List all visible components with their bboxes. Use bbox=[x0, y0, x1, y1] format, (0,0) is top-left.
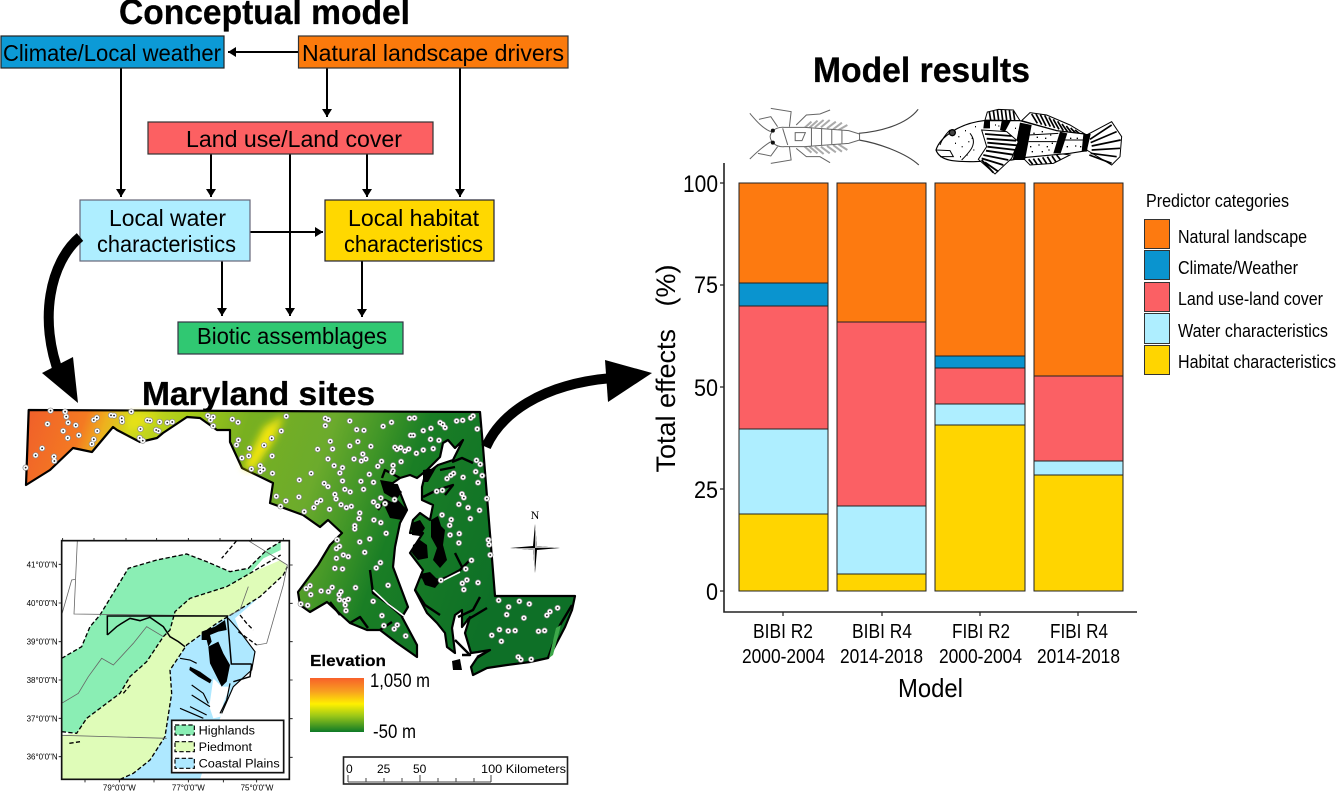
bar: BIBI R4 bbox=[837, 183, 926, 591]
Maryland outline filled with elevation bbox=[26, 410, 575, 675]
box: Natural landscape drivers: Natural landscape drivers bbox=[302, 40, 564, 66]
box: Local habitat characteristics: Local habitat bbox=[348, 205, 480, 231]
bar: BIBI R2 bbox=[739, 183, 828, 591]
box: Local water characteristics: Local water bbox=[109, 205, 226, 231]
x axis title: Model bbox=[898, 673, 963, 703]
ticks bbox=[59, 538, 293, 782]
box: Local water characteristics: characteristics bbox=[97, 231, 236, 257]
arrows between conceptual boxes bbox=[121, 52, 460, 317]
latitude labels: 41°0'0"N bbox=[27, 560, 58, 569]
legend: predictor categories: Predictor categories bbox=[1146, 191, 1289, 211]
inset legend bbox=[172, 720, 284, 773]
box: Land use/Land cover: Land use/Land cover bbox=[186, 126, 402, 152]
box: Biotic assemblages: Biotic assemblages bbox=[197, 323, 387, 349]
longitude labels bbox=[103, 784, 274, 791]
x axis labels: FIBI R4 bbox=[1050, 621, 1108, 643]
inset background bbox=[62, 541, 289, 779]
y axis tick labels: 25 bbox=[694, 477, 718, 504]
fish bands bbox=[983, 120, 1091, 160]
legend: elevation: 1,050 m bbox=[370, 671, 430, 692]
state borders bbox=[62, 541, 287, 738]
fish head details bbox=[949, 130, 955, 136]
region: Highlands bbox=[62, 542, 281, 733]
fish fins bbox=[985, 109, 1122, 165]
scale bar: 25 bbox=[377, 762, 391, 776]
x axis labels: 2014-2018 bbox=[1037, 646, 1120, 668]
fish pectoral fin bbox=[978, 130, 1018, 174]
icon: north arrow compass: N bbox=[531, 508, 540, 522]
x axis labels: FIBI R2 bbox=[952, 621, 1010, 643]
x axis labels: BIBI R4 bbox=[852, 621, 912, 643]
black marsh patches bbox=[380, 468, 462, 670]
sampling site markers bbox=[26, 411, 558, 660]
region: Coastal Plains bbox=[120, 597, 260, 779]
fish fin stripes bbox=[989, 110, 1121, 165]
y axis tick labels: 75 bbox=[694, 272, 718, 299]
arrow: curved arrow from map to model results bbox=[486, 360, 652, 447]
legend: predictor categories: Natural landscape bbox=[1178, 227, 1307, 247]
legend: predictor categories: Climate/Weather bbox=[1178, 258, 1298, 278]
box: Climate/Local weather: Climate/Local weather bbox=[3, 40, 221, 66]
marker rings bbox=[26, 411, 558, 660]
legend: elevation: Elevation bbox=[310, 653, 386, 670]
scale bar: 0 bbox=[346, 762, 353, 776]
legend: elevation bbox=[310, 653, 430, 743]
box: Local habitat characteristics: characteristics bbox=[344, 231, 483, 257]
icon: mayfly larva bbox=[750, 108, 919, 165]
arrow: curved arrow from conceptual model to Maryland sites bbox=[42, 237, 80, 403]
x axis labels: 2014-2018 bbox=[840, 646, 923, 668]
latitude labels: 39°0'0"N bbox=[27, 638, 58, 647]
latitude labels bbox=[27, 560, 58, 762]
box: Local water characteristics bbox=[80, 200, 250, 261]
inset frame bbox=[62, 541, 289, 779]
legend: predictor categories bbox=[1144, 191, 1336, 374]
box: Local habitat characteristics bbox=[325, 200, 494, 261]
bar: FIBI R2 bbox=[935, 183, 1025, 591]
bar: FIBI R4 bbox=[1034, 183, 1123, 591]
y axis title: Total effects (%) bbox=[651, 264, 681, 473]
latitude labels: 40°0'0"N bbox=[27, 599, 58, 608]
scale bar: 50 bbox=[413, 762, 427, 776]
y axis tick labels: 50 bbox=[694, 375, 718, 402]
icon: north arrow compass bbox=[510, 508, 560, 573]
assateague island bbox=[549, 625, 561, 658]
latitude labels: 37°0'0"N bbox=[27, 714, 58, 723]
latitude labels: 36°0'0"N bbox=[27, 753, 58, 762]
y axis tick labels bbox=[683, 171, 718, 606]
latitude labels: 38°0'0"N bbox=[27, 676, 58, 685]
panel: conceptual model flow diagram bbox=[1, 36, 568, 354]
marker centres bbox=[26, 411, 558, 660]
inset legend: Coastal Plains bbox=[199, 757, 280, 771]
region: Piedmont bbox=[62, 560, 287, 779]
y axis tick labels: 100 bbox=[683, 171, 718, 198]
x axis labels: 2000-2004 bbox=[742, 646, 825, 668]
title: Maryland sites: Maryland sites bbox=[142, 375, 375, 412]
scale bar bbox=[344, 757, 568, 784]
Maryland outline bbox=[107, 616, 255, 713]
x axis labels bbox=[742, 621, 1120, 668]
inset map: physiographic regions bbox=[27, 538, 293, 791]
Chesapeake Bay marsh outlines bbox=[189, 620, 230, 687]
x axis labels: 2000-2004 bbox=[939, 646, 1022, 668]
map: Maryland elevation and sites bbox=[26, 410, 575, 675]
chart: stacked bars of total effects bbox=[651, 163, 1137, 703]
fish body bbox=[936, 121, 1087, 162]
title: Model results: Model results bbox=[813, 51, 1030, 90]
y axis tick labels: 0 bbox=[706, 579, 718, 606]
chart axes bbox=[724, 163, 1137, 612]
tidal shorelines on the western shore bbox=[330, 470, 405, 630]
inset legend: Highlands bbox=[199, 723, 255, 737]
legend: elevation: -50 m bbox=[373, 722, 416, 743]
scale bar: 100 Kilometers bbox=[481, 762, 566, 776]
icon: banded darter fish bbox=[936, 109, 1122, 174]
marker fills bbox=[26, 411, 558, 660]
box: Land use/Land cover bbox=[148, 122, 433, 154]
x axis labels: BIBI R2 bbox=[753, 621, 813, 643]
tidal shorelines on the eastern shore bbox=[415, 458, 572, 658]
ridge highlights bbox=[126, 413, 284, 470]
white tidal rivers bbox=[373, 572, 460, 616]
Delmarva and bay water bbox=[209, 678, 230, 718]
region boundaries bbox=[62, 541, 287, 779]
inset legend: Piedmont bbox=[199, 740, 253, 754]
